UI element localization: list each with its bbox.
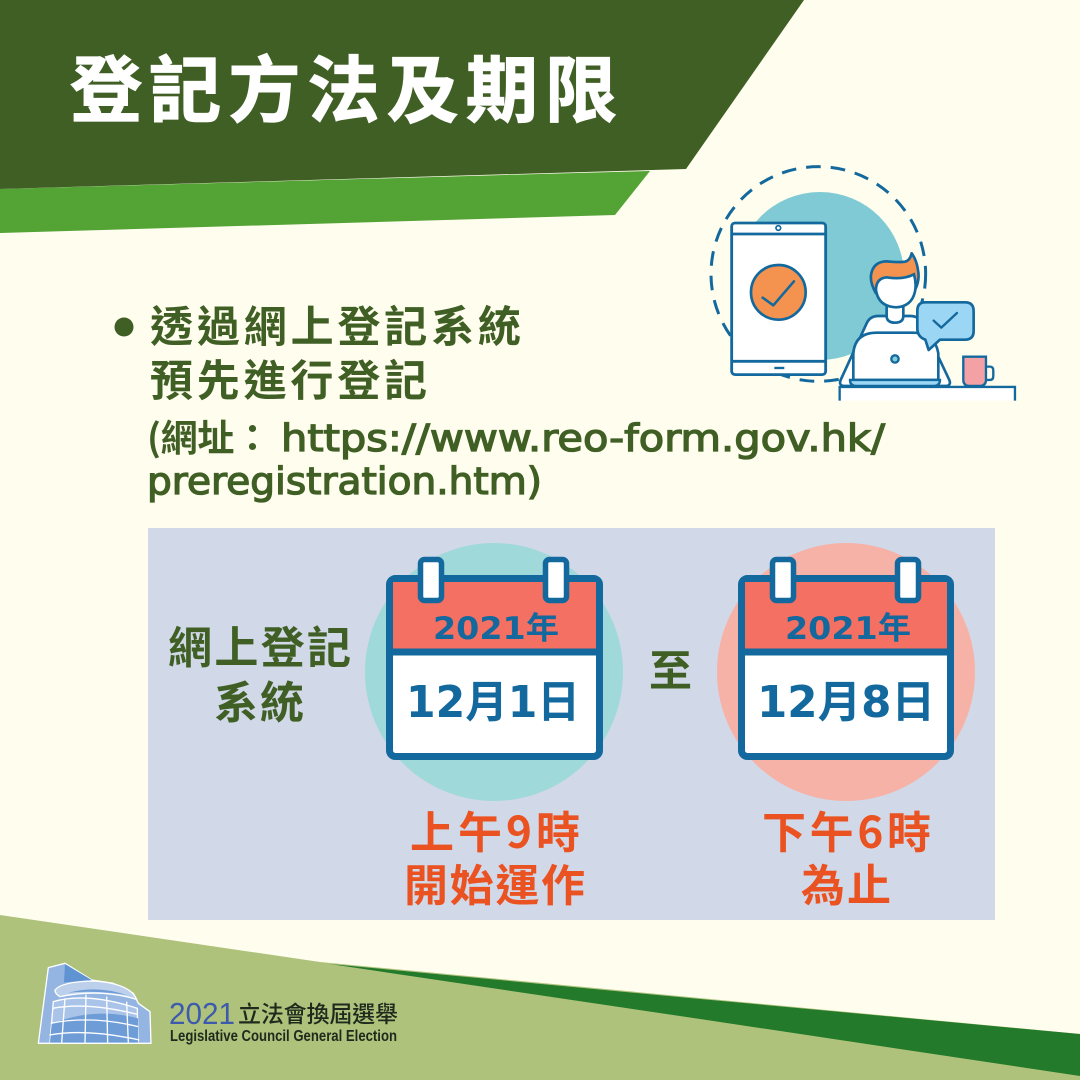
connector word: 至 [649, 637, 692, 699]
start time: 上午9時 [410, 797, 580, 861]
panel label [168, 612, 351, 731]
logo: election name [169, 995, 398, 1045]
icon: tablet [732, 223, 826, 375]
calendar: start date [365, 543, 623, 801]
calendar: start date: 12月1日 [406, 677, 580, 728]
header banner [0, 0, 804, 233]
registration method text: 預先進行登記 [150, 347, 427, 409]
title: 登記方法及期限 [70, 32, 617, 137]
start time: 開始運作 [404, 850, 585, 914]
icon: person with laptop [840, 253, 950, 386]
registration method text: preregistration.htm) [147, 460, 542, 503]
logo: council building [38, 963, 151, 1043]
logo: election name: 2021 [169, 996, 235, 1031]
end time: 下午6時 [762, 797, 931, 861]
end time: 為止 [801, 850, 891, 914]
icon: mug [963, 357, 993, 386]
end time [762, 797, 931, 914]
calendar: end date: 12月8日 [757, 677, 935, 728]
registration method text: 透過網上登記系統 [150, 293, 521, 355]
calendar: end date [717, 543, 975, 801]
logo: election name: 立法會換屆選舉 [238, 995, 398, 1029]
registration method text [147, 293, 886, 503]
calendar: end date: 2021年 [785, 611, 911, 647]
footer band [0, 915, 1080, 1080]
calendar: start date: 2021年 [433, 611, 559, 647]
start time [404, 797, 585, 914]
registration method text: https://www.reo-form.gov.hk/ [281, 417, 886, 460]
logo: election name: Legislative Council General Election [170, 1028, 397, 1045]
illustration: person registering online [711, 167, 1015, 401]
panel label: 系統 [214, 667, 304, 731]
panel label: 網上登記 [168, 612, 351, 676]
registration method text: (網址： [147, 408, 271, 462]
icon: speech bubble [917, 302, 974, 350]
panel: registration period [148, 528, 995, 920]
bullet [114, 318, 134, 336]
